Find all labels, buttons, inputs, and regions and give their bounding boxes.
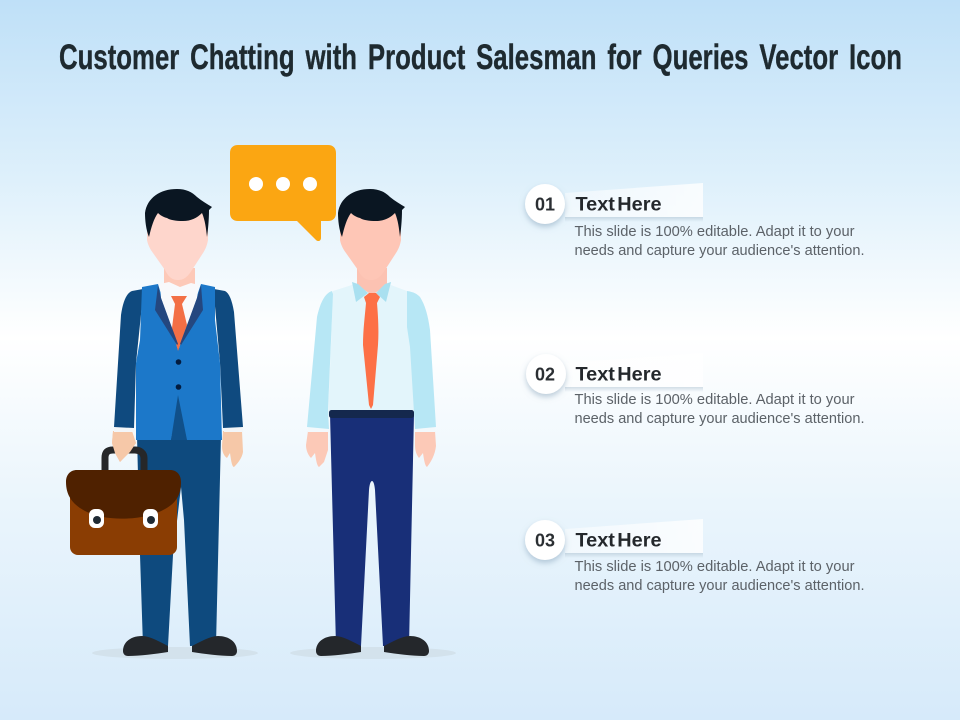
body text: This slide is 100% editable. Adapt it to your — [574, 559, 855, 575]
briefcase — [66, 432, 181, 555]
body text: needs and capture your audience's attention. — [574, 243, 864, 259]
number badge — [525, 184, 565, 224]
hair — [145, 189, 212, 237]
collar — [352, 282, 391, 302]
neck — [357, 268, 387, 295]
cuffs — [308, 427, 435, 432]
sleeves — [114, 289, 243, 428]
head — [147, 205, 208, 280]
hands — [306, 431, 436, 467]
banner — [565, 183, 703, 217]
heading: Text Here — [576, 530, 662, 552]
list item 03 — [525, 519, 864, 594]
hands — [112, 431, 243, 467]
number badge — [525, 520, 565, 560]
shoes — [316, 636, 429, 656]
body text: This slide is 100% editable. Adapt it to your — [574, 392, 855, 408]
list item 02: 02 — [535, 364, 555, 384]
flap — [66, 470, 181, 519]
neck — [164, 268, 195, 293]
figure: man in blue suit — [112, 189, 243, 656]
heading: Text Here — [576, 194, 662, 216]
jacket — [136, 284, 222, 440]
ground shadow: salesman — [92, 647, 258, 659]
body text: needs and capture your audience's attention. — [574, 578, 864, 594]
shirt — [328, 284, 415, 415]
body text: This slide is 100% editable. Adapt it to your — [574, 224, 855, 240]
case body — [70, 490, 177, 555]
clasps — [89, 509, 158, 528]
list item 02 — [526, 353, 864, 427]
list item 01 — [525, 183, 864, 259]
sleeves — [307, 291, 436, 429]
hand on handle — [112, 432, 136, 462]
figure: man in white shirt — [306, 189, 436, 656]
cuffs — [114, 427, 243, 432]
trousers — [330, 414, 414, 646]
speech bubble — [230, 145, 336, 241]
body text: needs and capture your audience's attention. — [574, 411, 864, 427]
heading: Text Here — [576, 364, 662, 386]
ground shadow: customer — [290, 647, 456, 659]
tie — [171, 296, 187, 351]
list item 03: 03 — [535, 530, 555, 550]
lapels — [155, 285, 203, 345]
number badge — [526, 354, 566, 394]
shoes — [123, 636, 237, 656]
shirt — [160, 282, 199, 348]
head — [340, 205, 401, 280]
hair — [338, 189, 405, 237]
jacket vent — [171, 395, 187, 440]
buttons — [176, 359, 181, 390]
list item 01: 01 — [535, 194, 555, 214]
banner — [565, 353, 703, 387]
belt — [329, 410, 414, 418]
dots — [249, 177, 317, 191]
tie — [363, 293, 380, 409]
trousers — [137, 436, 221, 646]
handle — [105, 450, 144, 472]
banner — [565, 519, 703, 553]
